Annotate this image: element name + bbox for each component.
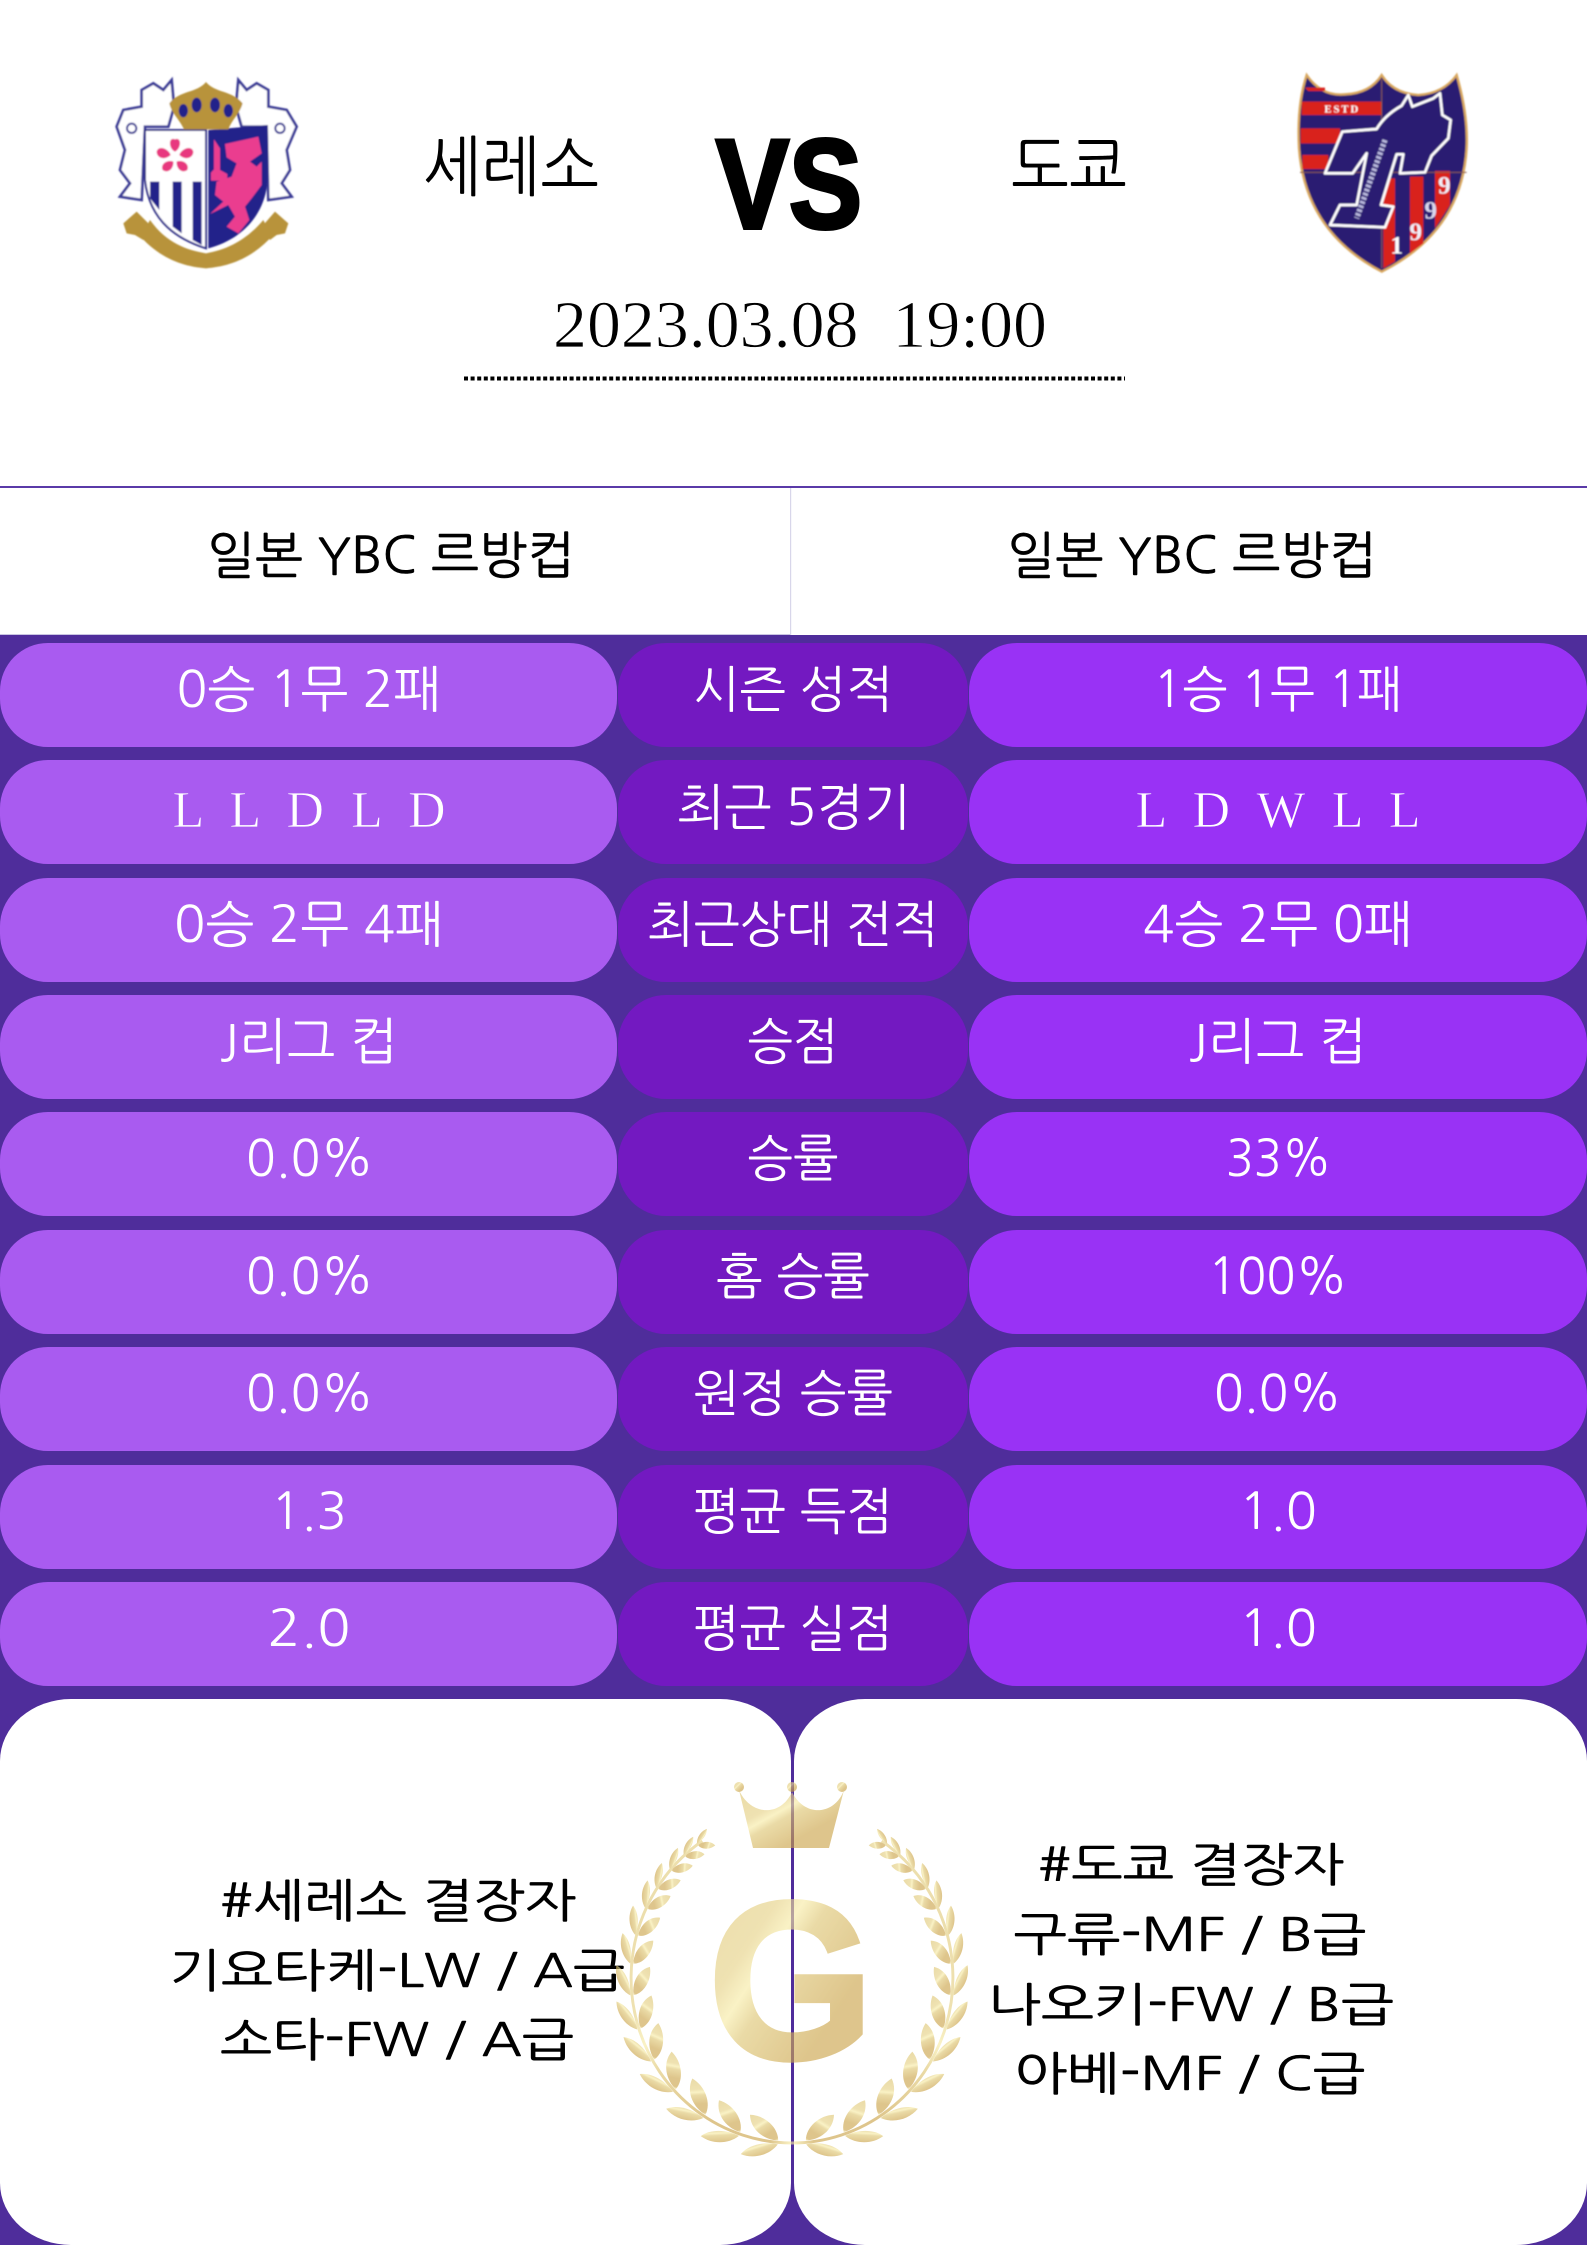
team name: Cerezo: 세레소: [423, 134, 599, 200]
row: win rate: 승률: [748, 1134, 838, 1184]
row: head to head: 4승 2무 0패: [1143, 900, 1413, 950]
icon: FC Tokyo crest: 1: [1390, 231, 1403, 259]
row: away win rate: 0.0%: [1214, 1369, 1342, 1419]
row: home win rate: 0.0%: [246, 1252, 374, 1302]
purple stats background: [0, 635, 1587, 2245]
absentee list left: [169, 1878, 625, 2063]
team name: Tokyo: 도쿄: [1011, 134, 1127, 200]
row: season record: 시즌 성적: [693, 665, 893, 715]
row: points: 승점: [748, 1017, 838, 1067]
league name right: 일본 YBC 르방컵: [1007, 531, 1377, 581]
row: average goals conceded: 2.0: [268, 1604, 350, 1654]
row: home win rate: 홈 승률: [716, 1252, 870, 1302]
row: average goals scored: [0, 1465, 1587, 1569]
absentee list right: [988, 1842, 1394, 2097]
header: white match banner: [0, 0, 1587, 486]
row: head to head: 최근상대 전적: [648, 900, 938, 950]
row: last five matches: L L D L D: [172, 782, 446, 839]
absentee list left: 기요타케-LW / A급: [169, 1948, 625, 1994]
row: average goals scored: 1.0: [1239, 1487, 1317, 1537]
row: away win rate: 원정 승률: [693, 1369, 893, 1419]
row: season record: [0, 643, 1587, 747]
row: last five matches: [0, 760, 1587, 864]
row: average goals conceded: 1.0: [1239, 1604, 1317, 1654]
row: last five matches: 최근 5경기: [677, 783, 911, 833]
row: season record: 0승 1무 2패: [176, 665, 442, 715]
absentee list right: 나오키-FW / B급: [988, 1982, 1394, 2028]
row: home win rate: [0, 1230, 1587, 1334]
icon: FC Tokyo crest: 9: [1409, 218, 1422, 246]
absentee list left: 소타-FW / A급: [220, 2017, 574, 2063]
VS label: VS: [716, 113, 862, 255]
absentee list right: 구류-MF / B급: [1014, 1912, 1366, 1958]
row: away win rate: 0.0%: [246, 1369, 374, 1419]
absentee list right: 아베-MF / C급: [1014, 2051, 1366, 2097]
row: last five matches: L D W L L: [1136, 782, 1420, 839]
league header band: [0, 486, 1587, 636]
match date and time: 2023.03.08 19:00: [553, 288, 1047, 362]
icon: FC Tokyo crest: 9: [1438, 171, 1451, 199]
row: points: J리그 컵: [1189, 1017, 1367, 1067]
row: win rate: [0, 1112, 1587, 1216]
icon: Cerezo Osaka crest: [117, 80, 297, 268]
row: season record: 1승 1무 1패: [1154, 665, 1402, 715]
row: average goals conceded: [0, 1582, 1587, 1686]
row: head to head: 0승 2무 4패: [174, 900, 444, 950]
absentee list right: #도쿄 결장자: [1038, 1842, 1344, 1888]
panel: Tokyo absentees: [794, 1699, 1587, 2245]
icon: FC Tokyo crest: ESTD: [1324, 105, 1360, 116]
icon: FC Tokyo crest: [1299, 75, 1467, 272]
stats table: [0, 643, 1587, 1686]
laurel wreath right: [792, 1828, 969, 2159]
league name left: 일본 YBC 르방컵: [207, 531, 575, 581]
letter G: G: [708, 1856, 874, 2106]
panel: Cerezo absentees: [0, 1699, 791, 2245]
row: points: J리그 컵: [220, 1017, 398, 1067]
absentee list left: #세레소 결장자: [220, 1878, 576, 1924]
dotted underline: [464, 376, 1125, 380]
row: away win rate: [0, 1347, 1587, 1451]
row: win rate: 0.0%: [246, 1134, 374, 1184]
crown: [734, 1782, 847, 1848]
row: home win rate: 100%: [1208, 1252, 1348, 1302]
row: head to head: [0, 878, 1587, 982]
laurel wreath left: [615, 1828, 792, 2159]
row: win rate: 33%: [1226, 1134, 1332, 1184]
row: points: [0, 995, 1587, 1099]
row: average goals scored: 1.3: [271, 1487, 347, 1537]
icon: gold crown and laurel G emblem: [615, 1782, 969, 2159]
row: average goals scored: 평균 득점: [693, 1487, 893, 1537]
icon: FC Tokyo crest: 9: [1424, 196, 1437, 224]
row: average goals conceded: 평균 실점: [693, 1604, 893, 1654]
